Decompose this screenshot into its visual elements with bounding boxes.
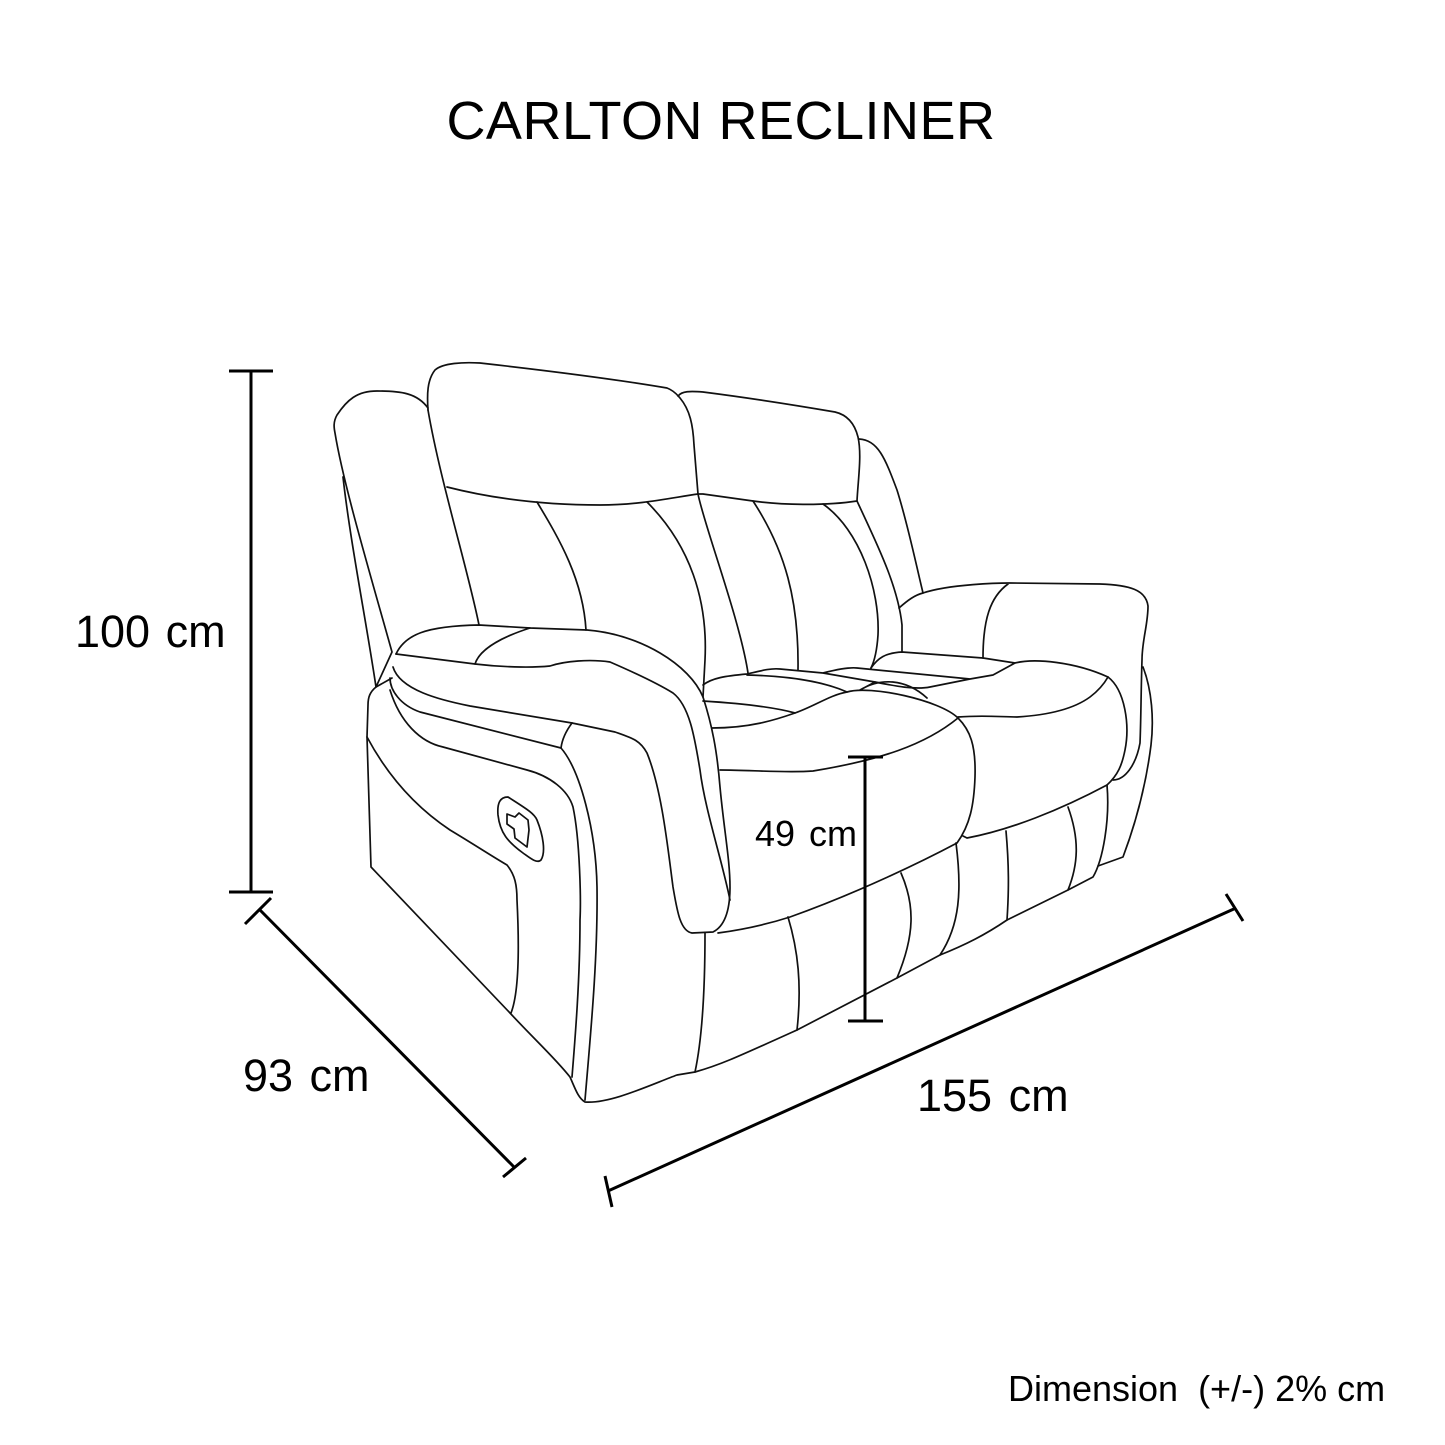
dimension: height 100 cm <box>75 371 273 892</box>
back cushion seams <box>537 494 902 697</box>
front left seat <box>712 690 975 933</box>
dimension: height 100 cm: 100 cm <box>75 606 226 657</box>
front seat seams <box>703 677 1108 772</box>
left back wing <box>334 391 428 687</box>
dimension: width 155 cm: 155 cm <box>917 1070 1069 1121</box>
right outer side <box>1098 667 1152 866</box>
skirt panels <box>695 807 1076 1072</box>
left headrest <box>428 363 698 505</box>
dimension: seat height 49 cm <box>755 757 883 1021</box>
dimension: width 155 cm <box>605 894 1243 1207</box>
dimension: depth 93 cm <box>243 898 526 1177</box>
side recess <box>367 737 518 1013</box>
left arm top <box>396 625 730 933</box>
title: CARLTON RECLINER <box>446 91 996 151</box>
left arm top panel <box>396 654 730 900</box>
rear seat deck <box>703 652 1127 838</box>
recliner handle <box>498 797 544 861</box>
sofa line drawing <box>334 363 1152 1102</box>
dimension: seat height 49 cm: 49 cm <box>755 813 857 854</box>
left wing inner edge <box>428 410 479 625</box>
left arm front layers <box>390 667 597 1100</box>
dimension: depth 93 cm: 93 cm <box>243 1050 370 1101</box>
footnote: Dimension (+/-) 2% cm <box>1008 1368 1385 1409</box>
right back wing <box>859 439 923 593</box>
side panel and body <box>367 678 1108 1102</box>
left seat cushion lines <box>747 675 927 698</box>
right headrest <box>678 391 860 504</box>
left arm seams <box>475 628 572 748</box>
right arm <box>899 583 1148 780</box>
